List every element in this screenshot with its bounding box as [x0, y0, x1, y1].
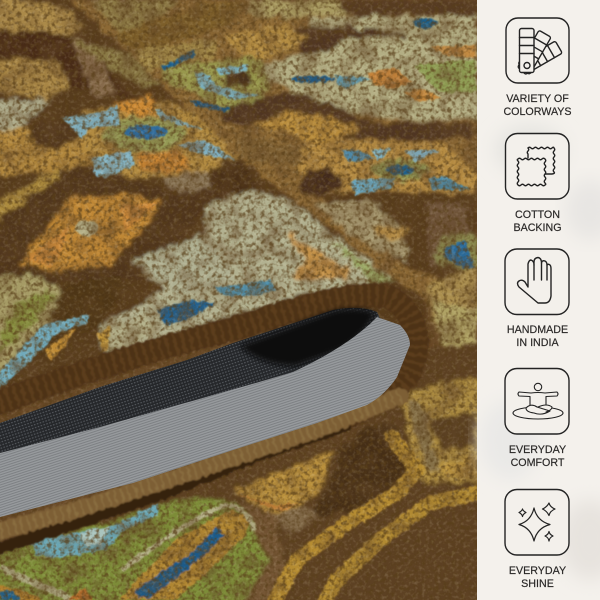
label: everyday comfort: EVERYDAY — [509, 444, 566, 456]
far rug surface — [60, 0, 477, 372]
sidebar background — [477, 0, 600, 600]
mottled shading — [0, 0, 477, 600]
label: everyday comfort: COMFORT — [511, 457, 565, 469]
icon: hand — [505, 249, 569, 314]
icon: colour swatch fan — [506, 18, 569, 83]
label: everyday shine: EVERYDAY — [509, 565, 566, 577]
lower rug surface — [0, 340, 490, 600]
label: cotton backing: BACKING — [513, 222, 562, 234]
grey cotton backing — [0, 308, 410, 517]
label: handmade in india: HANDMADE — [507, 324, 568, 336]
label: variety of colorways: VARIETY OF — [506, 93, 569, 105]
gold curved bands — [275, 437, 417, 600]
label: cotton backing: COTTON — [515, 209, 560, 221]
brown rug edge — [0, 295, 416, 550]
label: variety of colorways: COLORWAYS — [503, 106, 572, 118]
yarn texture — [0, 0, 477, 600]
icon: cotton swatches — [506, 134, 569, 199]
icon: sparkles — [505, 490, 569, 555]
icon: meditation — [505, 368, 569, 434]
label: handmade in india: IN INDIA — [516, 337, 559, 349]
rolled rug top surface — [0, 0, 430, 420]
label: everyday shine: SHINE — [521, 578, 554, 590]
